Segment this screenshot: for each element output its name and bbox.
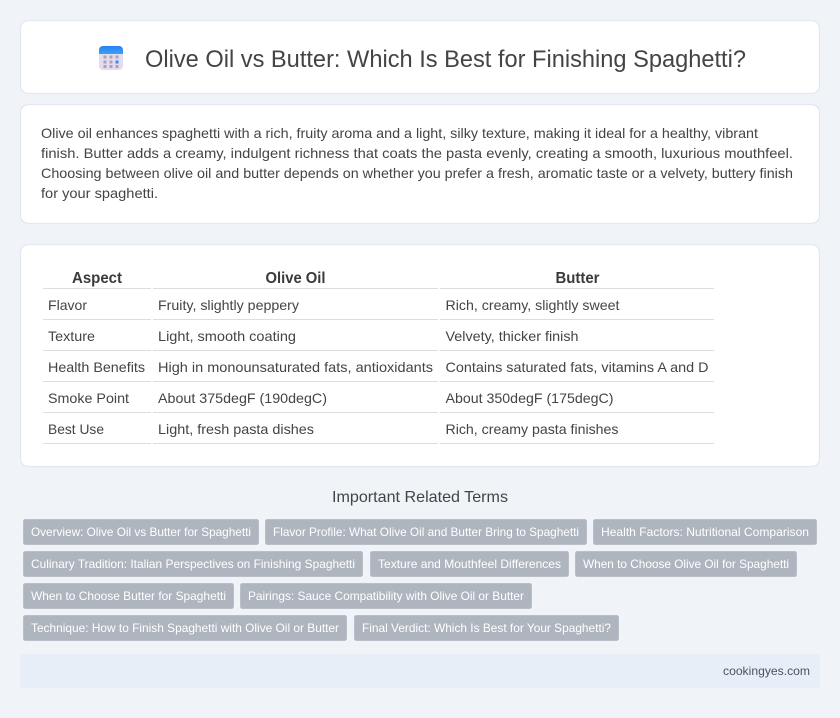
row: texture: Velvety, thicker finish (446, 328, 578, 344)
row: health benefits: Health Benefits (48, 359, 145, 375)
intro paragraph: for your spaghetti. (41, 185, 158, 201)
table header: Aspect (72, 270, 123, 287)
header panel (20, 20, 820, 94)
icon: calendar (99, 46, 123, 70)
row: best use: Best Use (48, 421, 104, 437)
row: texture: Light, smooth coating (158, 328, 296, 344)
table header: Olive Oil (266, 270, 326, 287)
heading: related terms: Important Related Terms (332, 489, 508, 506)
table header: Butter (556, 270, 600, 287)
related term tags: Health Factors: Nutritional Comparison (601, 525, 809, 539)
row: texture (48, 328, 578, 344)
row: flavor: Rich, creamy, slightly sweet (446, 297, 620, 313)
row: health benefits (48, 359, 708, 375)
footer site name: cookingyes.com (723, 664, 810, 678)
related term tags: Technique: How to Finish Spaghetti with Olive Oil or Butter (31, 621, 339, 635)
row: flavor: Flavor (48, 297, 87, 313)
row: best use: Rich, creamy pasta finishes (446, 421, 618, 437)
related term tags: Flavor Profile: What Olive Oil and Butter Bring to Spaghetti (273, 525, 579, 539)
row: health benefits: High in monounsaturated fats, antioxidants (158, 359, 433, 375)
row: flavor: Fruity, slightly peppery (158, 297, 299, 313)
related term tags: Overview: Olive Oil vs Butter for Spaghetti (31, 525, 251, 539)
table header (72, 270, 600, 287)
intro paragraph (41, 125, 793, 201)
row: smoke point: About 350degF (175degC) (446, 390, 614, 406)
panel: intro text (20, 104, 820, 224)
row: flavor (48, 297, 620, 313)
related term tags: Culinary Tradition: Italian Perspectives on Finishing Spaghetti (31, 557, 355, 571)
footer (20, 654, 820, 688)
intro paragraph: Olive oil enhances spaghetti with a rich, fruity aroma and a light, silky texture, making it ideal for a healthy, vibrant (41, 125, 758, 141)
row: smoke point: Smoke Point (48, 390, 129, 406)
row: best use: Light, fresh pasta dishes (158, 421, 314, 437)
related term tags: When to Choose Olive Oil for Spaghetti (583, 557, 789, 571)
title: Olive Oil vs Butter: Which Is Best for Finishing Spaghetti? (145, 46, 746, 73)
related term tags: Texture and Mouthfeel Differences (378, 557, 561, 571)
row: texture: Texture (48, 328, 95, 344)
row: best use (48, 421, 618, 437)
related term tags (24, 520, 816, 640)
related term tags: When to Choose Butter for Spaghetti (31, 589, 226, 603)
related term tags: Pairings: Sauce Compatibility with Olive Oil or Butter (248, 589, 524, 603)
intro paragraph: finish. Butter adds a creamy, indulgent richness that coats the pasta evenly, creating a smooth, luxurious mouthfeel. (41, 145, 793, 161)
related term tags: Final Verdict: Which Is Best for Your Spaghetti? (362, 621, 611, 635)
intro paragraph: Choosing between olive oil and butter depends on whether you prefer a fresh, aromatic taste or a velvety, buttery finish (41, 165, 793, 181)
row: smoke point: About 375degF (190degC) (158, 390, 327, 406)
panel: comparison table (20, 244, 820, 466)
row: smoke point (48, 390, 614, 406)
row: health benefits: Contains saturated fats, vitamins A and D (446, 359, 708, 375)
